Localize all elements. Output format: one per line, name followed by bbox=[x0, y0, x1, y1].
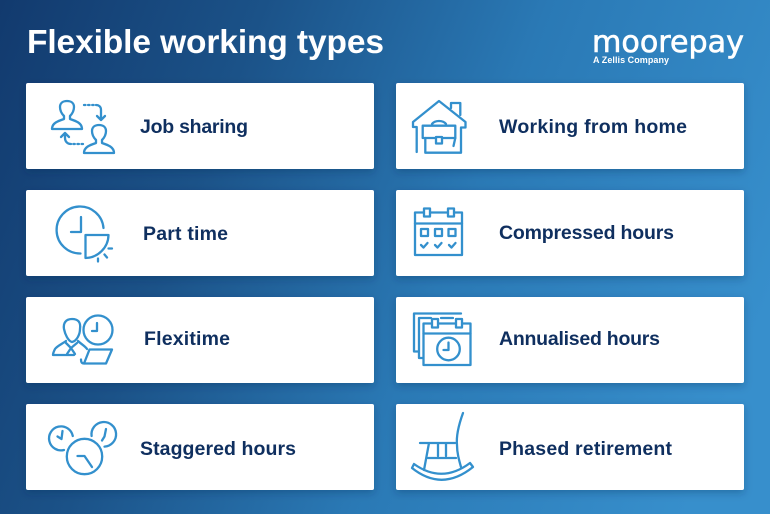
panel: compressed hours bbox=[396, 190, 744, 276]
label: Job sharing bbox=[140, 116, 248, 138]
icon: two people swapping bbox=[52, 101, 114, 153]
label: Part time bbox=[143, 223, 228, 245]
label: Compressed hours bbox=[499, 222, 674, 244]
icon: house with briefcase bbox=[413, 101, 466, 153]
icon: three clocks bbox=[49, 422, 116, 474]
panel: phased retirement bbox=[396, 404, 744, 490]
panel: flexitime bbox=[26, 297, 374, 383]
icon: calendar with checks bbox=[415, 208, 462, 255]
icon: stacked calendars with clock bbox=[414, 314, 470, 365]
label: Phased retirement bbox=[499, 438, 672, 460]
icon: person with clock and laptop bbox=[53, 316, 112, 364]
label: Flexitime bbox=[144, 328, 230, 350]
logo: moorepay: moorepay bbox=[592, 25, 744, 60]
panel: part time bbox=[26, 190, 374, 276]
icon: clock with quarter wedge bbox=[57, 207, 112, 262]
label: Working from home bbox=[499, 116, 687, 138]
panel: annualised hours bbox=[396, 297, 744, 383]
title: Flexible working types bbox=[27, 24, 384, 61]
panel: working from home bbox=[396, 83, 744, 169]
panel: job sharing bbox=[26, 83, 374, 169]
icon: rocking chair bbox=[412, 413, 473, 480]
label: Staggered hours bbox=[140, 438, 296, 460]
logo: moorepay: A Zellis Company bbox=[593, 55, 669, 65]
label: Annualised hours bbox=[499, 328, 660, 350]
panel: staggered hours bbox=[26, 404, 374, 490]
